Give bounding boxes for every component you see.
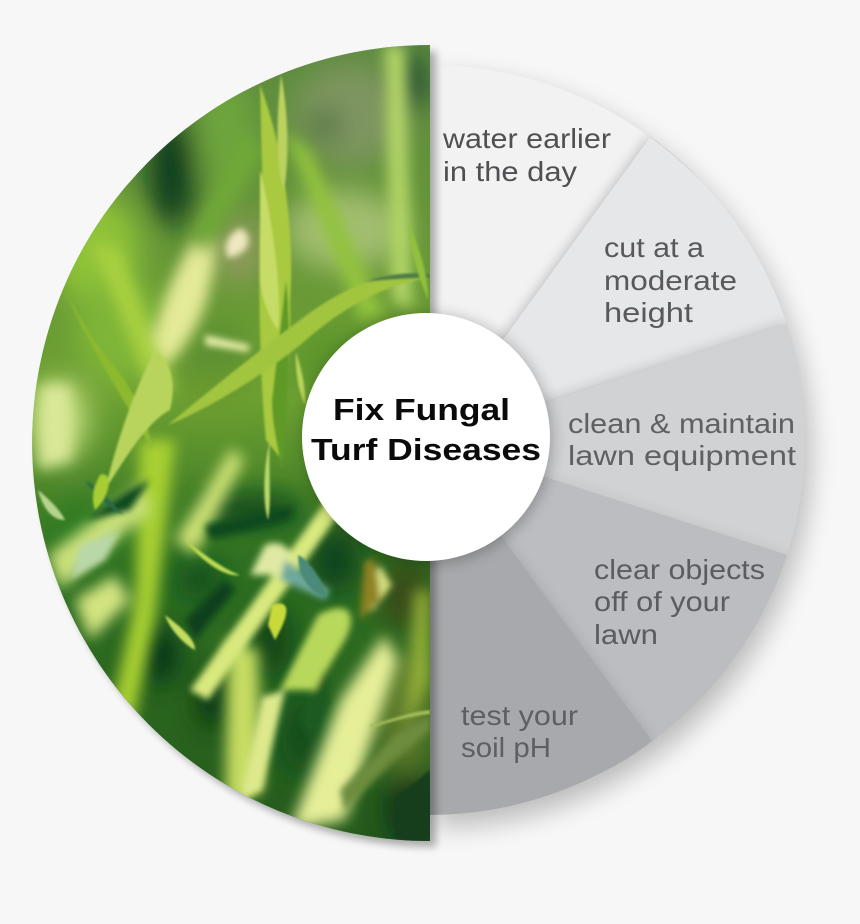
text: clear objects off of your lawn: clear objects [594, 554, 765, 585]
title: Fix Fungal Turf Diseases: Turf Diseases [311, 432, 541, 467]
wedge: test soil pH [430, 550, 652, 815]
text: clean and maintain lawn equipment: clean & maintain [568, 408, 795, 439]
text: clean and maintain lawn equipment: lawn equipment [568, 440, 796, 471]
text: cut at a moderate height: cut at a [604, 232, 704, 263]
panel: five advice wedges [400, 65, 805, 815]
text: water earlier: in the day [443, 156, 577, 187]
wedge: clear objects [521, 477, 786, 652]
wedge: clean and maintain [544, 324, 803, 554]
disc outer shadow [436, 77, 811, 827]
sharp blades [38, 75, 430, 841]
centre circle shadow [303, 314, 553, 564]
wedge: water earlier [430, 68, 650, 340]
blurred background blades [38, 45, 430, 830]
text: clear objects off of your lawn: lawn [594, 619, 658, 650]
photo shadow [38, 51, 436, 847]
title: Fix Fungal Turf Diseases: Fix Fungal [333, 392, 510, 427]
medium focus blades [70, 228, 430, 810]
text: test your soil pH: test your [461, 700, 578, 731]
wedge: cut at a moderate height [503, 137, 786, 402]
text: clear objects off of your lawn: off of your [594, 586, 730, 617]
text: test your soil pH: soil pH [461, 732, 551, 763]
blurred colour field [32, 52, 436, 846]
text: water earlier: water earlier [442, 123, 611, 154]
photo: grass half disc [20, 30, 440, 850]
text: cut at a moderate height: height [604, 297, 693, 328]
text: cut at a moderate height: moderate [604, 265, 737, 296]
centre circle [302, 313, 550, 561]
